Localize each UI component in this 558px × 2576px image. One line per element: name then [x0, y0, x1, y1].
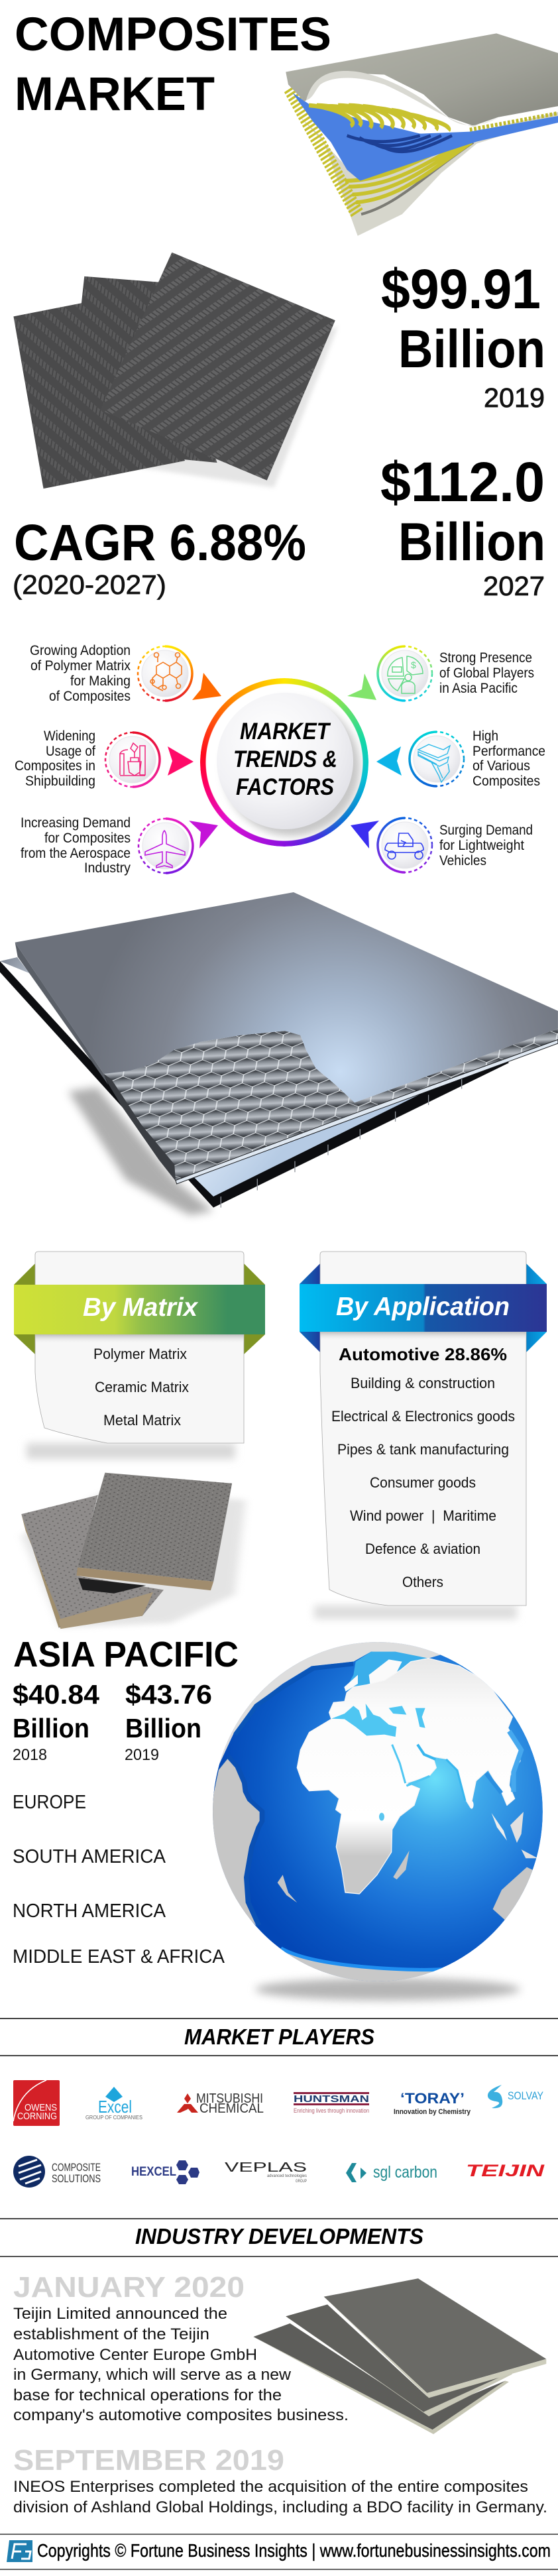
panel: by application: Consumer goods: [370, 1474, 476, 1491]
stat: asia pacific 2018: $40.84: [13, 1679, 99, 1710]
image: stacked composite plates: [253, 2278, 546, 2434]
stat: 2019 market size: 2019: [484, 382, 545, 413]
section rule: [0, 2218, 558, 2219]
stat: asia pacific 2019: Billion: [125, 1713, 201, 1743]
panel: by matrix: [14, 1252, 265, 1459]
panel: by application: [300, 1252, 547, 1619]
factor 4: asia pacific: $: [411, 660, 416, 670]
factor 4: asia pacific: Strong Presence: [439, 650, 532, 666]
development: january 2020: company's automotive composites business.: [13, 2406, 349, 2424]
logo: excel: Excel: [98, 2097, 132, 2117]
factor 2: shipbuilding: Composites in: [15, 758, 95, 774]
factor 6: lightweight vehicles: Vehicles: [439, 853, 486, 868]
heading: asia pacific: ASIA PACIFIC: [13, 1635, 239, 1674]
development: september 2019: SEPTEMBER 2019: [13, 2444, 284, 2477]
factor 5: high performance: High: [473, 729, 498, 744]
arrow: pink: [168, 746, 194, 776]
development: september 2019: division of Ashland Global Holdings, including a BDO facility in Germany.: [13, 2498, 547, 2516]
icon: molecule: [150, 652, 182, 691]
stat: CAGR: [13, 514, 306, 600]
logo: excel: [85, 2087, 142, 2121]
development: january 2020: establishment of the Teijin: [13, 2325, 209, 2343]
factor 5: high performance: of Various: [473, 758, 530, 774]
panel: by application: By Application: [336, 1293, 510, 1321]
stat: 2019 market size: Billion: [398, 320, 545, 379]
title: [15, 9, 331, 121]
logo: veplas: VEPLAS: [225, 2160, 307, 2175]
center rainbow ring: [200, 678, 368, 847]
logo: owens corning: [13, 2080, 60, 2126]
factor 1: polymer matrix: [30, 643, 192, 704]
logo: huntsman: [294, 2092, 369, 2114]
logo: toray: Innovation by Chemistry: [394, 2108, 471, 2116]
icon: pie chart with person: [388, 656, 423, 693]
title: MARKET: [15, 68, 215, 121]
stat: 2027 market size: Billion: [398, 512, 545, 572]
factor 1: polymer matrix: of Polymer Matrix: [30, 658, 131, 673]
development: january 2020: Automotive Center Europe GmbH: [13, 2346, 257, 2364]
section rule: [0, 2256, 558, 2257]
title: COMPOSITES: [15, 9, 331, 61]
logo: sgl carbon: sgl carbon: [373, 2163, 437, 2182]
logo: composite solutions: [13, 2156, 101, 2188]
stat: 2027 market size: $112.0: [380, 451, 545, 513]
factor 2: shipbuilding: [15, 729, 160, 789]
factor 5: high performance: Performance: [473, 744, 545, 759]
factor 3: aerospace: for Composites: [44, 831, 131, 846]
stat: 2019 market size: $99.91: [381, 258, 541, 320]
regions list: SOUTH AMERICA: [13, 1846, 166, 1867]
development: january 2020: JANUARY 2020: [13, 2271, 245, 2304]
image: textured composite panels: [21, 1473, 246, 1629]
image: aluminium honeycomb panel: [0, 892, 558, 1215]
arrow: cyan: [376, 746, 402, 776]
arrow: purple: [189, 821, 218, 849]
stat: 2027 market size: [380, 451, 545, 601]
logo: huntsman: HUNTSMAN: [294, 2093, 369, 2105]
logo: huntsman: Enriching lives through innovation: [294, 2107, 369, 2114]
factor 6: lightweight vehicles: Surging Demand: [439, 823, 533, 838]
panel: by matrix: By Matrix: [83, 1293, 198, 1322]
development: september 2019: INEOS Enterprises completed the acquisition of the entire composites: [13, 2478, 528, 2496]
development: january 2020: base for technical operations for the: [13, 2386, 282, 2404]
logo: composite solutions: SOLUTIONS: [52, 2172, 101, 2185]
logo: veplas: [225, 2160, 307, 2184]
panel: by application: Building & construction: [351, 1375, 495, 1391]
stat: 2027 market size: 2027: [483, 571, 545, 601]
logo: owens corning: CORNING: [17, 2111, 57, 2122]
factor 4: asia pacific: in Asia Pacific: [439, 681, 518, 696]
logo: mitsubishi chemical: [177, 2091, 264, 2116]
stat: asia pacific 2019: $43.76: [125, 1679, 212, 1710]
development: january 2020: [13, 2271, 349, 2424]
factor 3: aerospace: Industry: [84, 860, 131, 876]
factor 6: lightweight vehicles: [378, 818, 533, 872]
icon: ship: [120, 743, 145, 776]
factor 3: aerospace: Increasing Demand: [21, 815, 131, 831]
logo: solvay: [488, 2085, 543, 2108]
center disc: market trends and factors: MARKET: [240, 719, 331, 744]
center disc: market trends and factors: TRENDS &: [233, 746, 337, 772]
logo: owens corning: OWENS: [25, 2102, 57, 2113]
logo: solvay: SOLVAY: [508, 2089, 543, 2102]
logo: teijin: TEIJIN: [466, 2162, 545, 2180]
panel: by application: Wind power | Maritime: [350, 1507, 496, 1524]
factor 1: polymer matrix: Growing Adoption: [30, 643, 131, 658]
factor 5: high performance: [410, 729, 545, 789]
logo: composite solutions: COMPOSITE: [52, 2161, 101, 2174]
development: january 2020: in Germany, which will serve as a new: [13, 2366, 292, 2384]
panel: by application: Defence & aviation: [365, 1541, 480, 1557]
factor 6: lightweight vehicles: for Lightweight: [439, 838, 524, 853]
section rule: [0, 2569, 558, 2570]
arrow: indigo: [351, 821, 379, 849]
image: carbon fibre sheets: [13, 253, 338, 489]
stat: asia pacific 2018: Billion: [13, 1713, 89, 1743]
panel: by application: Pipes & tank manufacturing: [337, 1441, 509, 1458]
stat: asia pacific 2019: 2019: [125, 1746, 159, 1764]
panel: by application: Automotive 28.86%: [339, 1344, 507, 1364]
stat: asia pacific 2018: 2018: [13, 1746, 47, 1764]
stat: asia pacific 2019: [125, 1679, 212, 1764]
logo: mitsubishi chemical: MITSUBISHI: [196, 2091, 263, 2106]
factor 4: asia pacific: of Global Players: [439, 666, 534, 681]
factor 4: asia pacific: [378, 646, 534, 701]
panel: by application: Others: [402, 1574, 443, 1590]
logo: toray: [394, 2090, 471, 2116]
logo: veplas: GROUP: [296, 2180, 307, 2184]
logo: sgl carbon: [346, 2163, 437, 2182]
factor 3: aerospace: from the Aerospace: [21, 846, 131, 861]
factor 1: polymer matrix: for Making: [70, 673, 131, 689]
heading: industry developments: INDUSTRY DEVELOPMENTS: [135, 2224, 423, 2249]
factor 2: shipbuilding: Widening: [44, 729, 95, 744]
stat: asia pacific 2018: [13, 1679, 99, 1764]
center disc: market trends and factors: FACTORS: [236, 774, 334, 800]
factor 1: polymer matrix: of Composites: [49, 689, 131, 704]
regions list: MIDDLE EAST & AFRICA: [13, 1946, 225, 1967]
section rule: [0, 2055, 558, 2056]
panel: by matrix: Ceramic Matrix: [95, 1379, 189, 1395]
center disc: market trends and factors: [217, 693, 360, 836]
icon: composite layers: [418, 744, 450, 782]
regions list: [13, 1792, 225, 1967]
heading: market players: MARKET PLAYERS: [184, 2024, 374, 2049]
logo: mitsubishi chemical: CHEMICAL: [199, 2101, 264, 2116]
section rule: [0, 2534, 558, 2535]
logo: toray: ‘TORAY’: [400, 2090, 465, 2107]
stat: 2019 market size: [381, 258, 545, 413]
icon: fortune business insights logo: [7, 2540, 32, 2562]
logo: excel: GROUP OF COMPANIES: [85, 2115, 142, 2121]
development: september 2019: [13, 2444, 547, 2516]
section rule: [0, 2018, 558, 2019]
logo: hexcel: [131, 2160, 199, 2184]
factor 2: shipbuilding: Shipbuilding: [25, 774, 95, 789]
logo: veplas: advanced technologies: [267, 2174, 307, 2178]
stat: CAGR: CAGR 6.88%: [14, 514, 306, 571]
panel: by matrix: Metal Matrix: [103, 1412, 181, 1429]
icon: airplane: [145, 831, 185, 868]
factor 3: aerospace: [21, 815, 193, 876]
stat: CAGR: (2020-2027): [13, 569, 166, 600]
logo: hexcel: HEXCEL: [131, 2165, 176, 2179]
globe: [212, 1637, 543, 2001]
panel: by application: Electrical & Electronics goods: [331, 1408, 515, 1425]
regions list: EUROPE: [13, 1792, 86, 1813]
arrow: green: [347, 673, 376, 700]
icon: buggy: [385, 833, 423, 859]
factor 2: shipbuilding: Usage of: [46, 744, 95, 759]
panel: by matrix: Polymer Matrix: [93, 1346, 187, 1362]
image: layered composite cutaway: [286, 33, 558, 236]
factor 5: high performance: Composites: [473, 774, 540, 789]
regions list: NORTH AMERICA: [13, 1901, 166, 1922]
arrow: orange: [192, 673, 221, 700]
development: january 2020: Teijin Limited announced the: [13, 2305, 227, 2323]
